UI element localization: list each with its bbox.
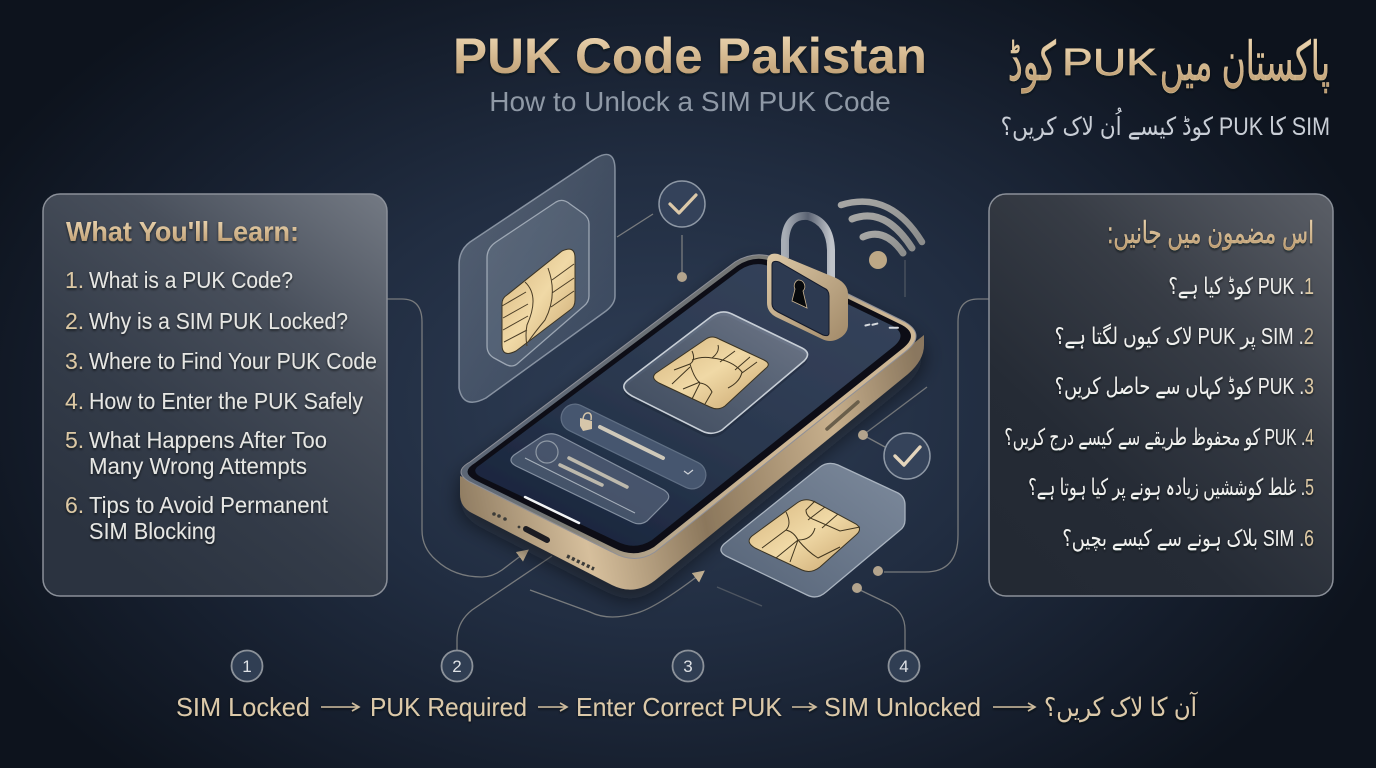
floating glass sim card [459,154,615,402]
keyhole [792,280,807,308]
step number 4: 4 [899,657,909,676]
urdu list: 3. PUK کوڈ کہاں سے حاصل کریں؟ [1055,374,1314,400]
screen pill: lock row [575,413,693,475]
urdu list: 6. SIM بلاک ہونے سے کیسے بچیں؟ [1062,526,1314,552]
learn list: Why is a SIM PUK Locked? [89,308,348,334]
port details [492,512,594,569]
connector dot [677,272,687,282]
step number 2 [442,650,472,682]
learn list [65,267,377,544]
lower sim card [721,463,905,597]
urdu title [1008,31,1330,93]
learn list: 3. [65,348,84,374]
arrow [993,703,1035,711]
urdu list: 4. PUK کو محفوظ طریقے سے کیسے درج کریں؟ [1004,425,1314,451]
small lock icon [580,413,592,431]
step label: sim locked: SIM Locked [176,692,310,722]
urdu list: 1. PUK کوڈ کیا ہے؟ [1168,274,1314,300]
step number 3 [672,650,704,682]
phone body side [460,335,924,590]
learn list: 1. [65,267,84,293]
phone [460,255,924,590]
status icons [865,318,898,335]
lock body [767,254,848,341]
urdu title: پاکستان میں [1160,33,1330,93]
check badge top [659,181,705,227]
connector dots [852,566,883,593]
phone top rim [461,255,916,559]
learn list: What Happens After Too [89,427,327,453]
step number 3: 3 [683,657,693,676]
learn list: Tips to Avoid Permanent [89,492,329,518]
side button [827,402,858,429]
step number 1: 1 [242,657,252,676]
learn list: Where to Find Your PUK Code [89,348,377,374]
glass sim on screen [624,312,808,437]
shackle [785,216,831,285]
learn list: What is a PUK Code? [89,267,293,293]
panel: urdu summary [989,194,1333,596]
sim chip [502,249,575,353]
urdu list: 5. غلط کوششیں زیادہ ہونے پر کیا ہوتا ہے؟ [1028,475,1314,502]
urdu subtitle: SIM کا PUK کوڈ کیسے اُن لاک کریں؟ [1001,107,1330,141]
step label: puk required: PUK Required [370,692,527,722]
learn list: How to Enter the PUK Safely [89,388,363,414]
step number 2: 2 [452,657,462,676]
phone screen [475,264,900,546]
step flow [176,692,1198,722]
panel: what you'll learn [43,194,387,596]
urdu list: 2. SIM پر PUK لاک کیوں لگتا ہے؟ [1055,323,1314,350]
step number 4 [888,650,920,682]
step number 1 [232,650,262,682]
home bar [525,497,579,523]
check badge lower [884,433,930,479]
urdu panel heading: اس مضمون میں جانیں: [1107,215,1314,251]
sim chip [654,337,768,409]
padlock [767,216,848,341]
screen pill: input row [511,434,669,524]
learn list: 6. [65,492,84,518]
wifi icon [841,202,922,269]
learn list: SIM Blocking [89,518,216,544]
step label: sim unlocked: SIM Unlocked [824,692,981,722]
subtitle: How to Unlock a SIM PUK Code [489,86,891,117]
urdu step label: آن کا لاک کریں؟ [1044,692,1198,722]
arrow [321,703,359,711]
connector lines [387,214,989,651]
learn list: 4. [65,388,84,414]
learn list: Many Wrong Attempts [89,453,307,479]
phone bezel [468,259,911,553]
learn list: 5. [65,427,84,453]
connector dot [858,430,868,440]
step label: enter correct puk: Enter Correct PUK [576,692,783,722]
urdu title: PUK [1062,42,1157,84]
arrow [792,703,816,711]
sim chip [749,500,860,571]
panel heading: What You'll Learn: [66,216,299,247]
learn list: 2. [65,308,84,334]
title: PUK Code Pakistan [453,27,927,84]
urdu title: کوڈ [1008,31,1056,93]
arrow [538,703,567,711]
urdu list [1004,274,1314,552]
lock panel [772,261,829,336]
